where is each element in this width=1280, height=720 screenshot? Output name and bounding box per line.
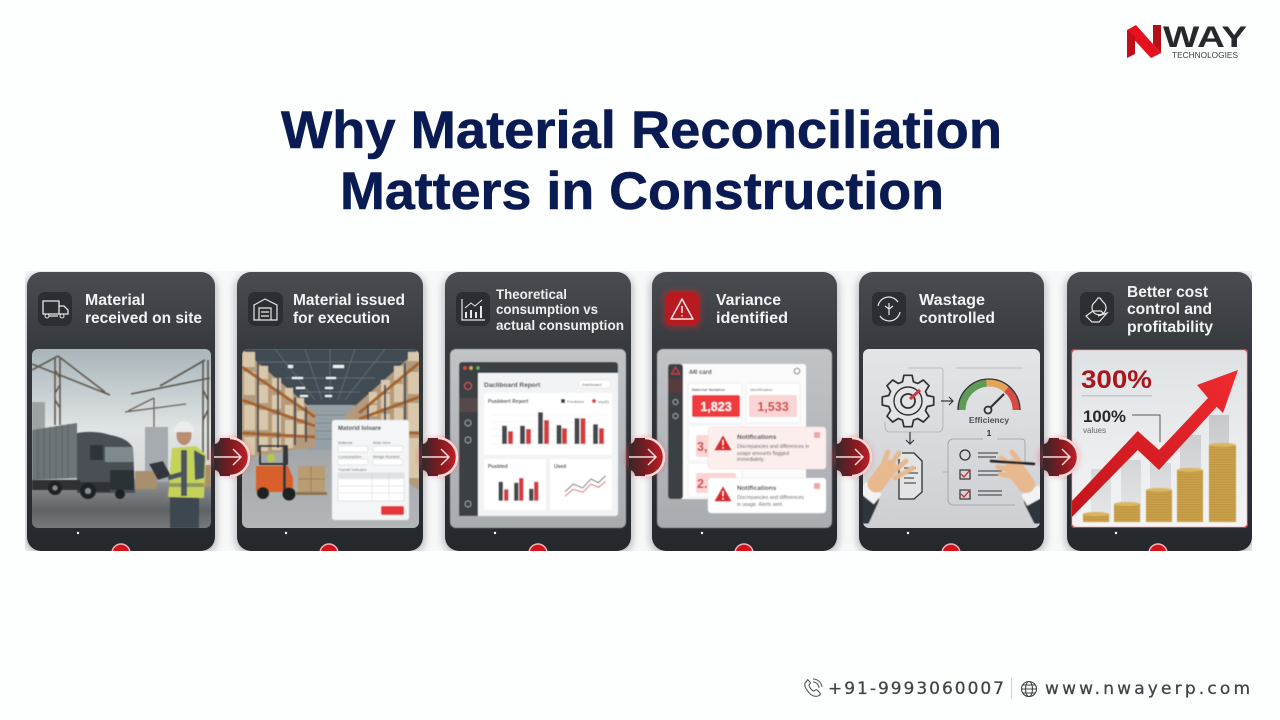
coin stacks [1083, 443, 1236, 522]
checklist [943, 439, 1025, 505]
stat card: 1,823: Material Variation [692, 387, 726, 392]
notification 2 [708, 478, 826, 513]
heading: material received on site: Material [85, 292, 145, 309]
arrow connector 4 [832, 437, 872, 477]
heading: variance identified: identified [716, 310, 788, 327]
bar chart: predicted report [484, 393, 612, 455]
step 1: material received on site [27, 272, 215, 562]
form card: Matorid loloare [338, 426, 382, 432]
form card: Material [338, 440, 352, 445]
gauge: efficiency [958, 379, 1020, 438]
indicator dot [112, 543, 130, 551]
icon: warehouse [248, 292, 283, 326]
step 4: variance identified [652, 272, 837, 562]
indicator dot [942, 543, 960, 551]
stat card: 1,533: Identification [750, 387, 772, 392]
heading: wastage controlled [919, 292, 995, 327]
stat card: 1,823 [688, 383, 742, 423]
stat card: partially hidden: 2.5 [697, 477, 714, 491]
form card: Bridge Number [373, 454, 401, 459]
notification 1: Discrepancies and differences in [737, 444, 809, 450]
icon: gear with target [882, 375, 934, 427]
indicator dot [734, 543, 754, 551]
stat card: 1,533 [746, 383, 800, 423]
step 3: theoretical vs actual consumption [445, 272, 631, 562]
heading: wastage controlled: Wastage [919, 292, 985, 309]
line chart: used: Used [554, 464, 566, 470]
heading: better cost control and profitability: control and [1127, 301, 1212, 318]
arrow connector 3 [625, 437, 665, 477]
notification 1 [708, 427, 826, 469]
bar chart: predicted report: Pusbleert Report [488, 399, 529, 405]
line chart: used [550, 459, 612, 510]
icon: truck [38, 292, 72, 326]
step 5: wastage controlled [858, 272, 1045, 562]
panel: alert dashboard: 44l card [689, 370, 712, 376]
heading: material issued for execution: Material issued [293, 292, 405, 309]
arrow connector 2 [418, 437, 458, 477]
notification 2: Notifications [737, 485, 777, 492]
logo: NWAY Technologies [1127, 21, 1247, 60]
document [899, 453, 922, 499]
indicator dot [320, 543, 338, 551]
heading: theoretical vs actual consumption: Theoretical [496, 287, 567, 302]
heading: better cost control and profitability: profitability [1127, 319, 1213, 336]
heading: wastage controlled: controlled [919, 310, 995, 327]
heading: better cost control and profitability [1127, 284, 1213, 336]
arrow: rising trend [1071, 370, 1238, 517]
stat card: partially hidden [688, 425, 742, 497]
arrow connector 1 [210, 437, 250, 477]
indicator dot [528, 543, 548, 551]
heading: material issued for execution: for execution [293, 310, 390, 327]
form card: Consumption [338, 454, 362, 459]
logo: NWAY Technologies: WAY [1163, 21, 1247, 54]
panel: dashboard report: Dacliboard Report [484, 382, 541, 389]
icon: phone [805, 679, 822, 696]
notification 2: in usage. Alerts sent. [737, 502, 783, 508]
heading: theoretical vs actual consumption: actual consumption [496, 318, 624, 333]
form card: Transit Indicator [338, 467, 367, 472]
icon: red warning triangle [662, 289, 702, 329]
step 6: better cost control and profitability [1067, 272, 1252, 562]
bar chart: predicted [484, 459, 546, 510]
form card [332, 420, 409, 520]
gauge: efficiency: 1 [987, 428, 992, 438]
bar chart: predicted: Pusbted [488, 464, 508, 470]
text: website: www.nwayerp.com [1045, 679, 1250, 699]
heading: material issued for execution [293, 292, 405, 327]
heading: variance identified: Variance [716, 292, 781, 309]
heading: material received on site [85, 292, 202, 327]
notification 2: Discrepancies and differences [737, 495, 804, 501]
stat card: partially hidden: 3, [697, 440, 707, 454]
icon: hand with money bag [1080, 292, 1114, 326]
footer contact [805, 678, 1250, 699]
heading: theoretical vs actual consumption: consumption vs [496, 302, 598, 317]
hands writing [858, 452, 1045, 520]
bar chart: predicted report: Predicted [567, 399, 584, 404]
stat: 100% values [1083, 407, 1160, 442]
illustration: process efficiency diagram [858, 349, 1045, 528]
stat: 100% values: 100% [1083, 407, 1126, 426]
bar chart: predicted report: aspi(t) [598, 399, 610, 404]
heading: material received on site: received on site [85, 310, 202, 327]
panel: dashboard report [450, 349, 626, 528]
step 2: material issued for execution [237, 272, 423, 562]
panel: alert dashboard [657, 349, 832, 528]
notification 1: usage amounts flagged [737, 451, 789, 457]
notification 1: immediately. [737, 457, 765, 463]
gauge: efficiency: Efficiency [969, 415, 1009, 425]
heading: variance identified [716, 292, 788, 327]
heading: better cost control and profitability: Better cost [1127, 284, 1208, 301]
stat: 300%: 300% [1081, 366, 1152, 394]
panel: dashboard report: Dashboard [582, 382, 602, 387]
photo: warehouse with forklift and form [242, 349, 419, 528]
logo: NWAY Technologies: TECHNOLOGIES [1172, 50, 1238, 60]
title: Matters in Construction [340, 162, 944, 221]
process strip background [25, 271, 1254, 554]
chart: rising profit arrow and coins [1071, 349, 1248, 528]
photo: truck and site worker [32, 349, 211, 528]
heading: theoretical vs actual consumption [496, 287, 624, 333]
title [281, 101, 1002, 221]
title: Why Material Reconciliation [281, 101, 1002, 160]
stat: 100% values: values [1083, 426, 1106, 435]
icon: globe [1022, 682, 1036, 696]
icon: line and bar chart [456, 292, 490, 326]
icon: recycle arrows [872, 292, 906, 326]
arrow connector 5 [1039, 437, 1079, 477]
indicator dot [1148, 543, 1168, 551]
stat card: 1,533: 1,533 [757, 400, 789, 414]
text: phone number: +91-9993060007 [828, 679, 1004, 699]
stat card: 1,823: 1,823 [700, 400, 732, 414]
notification 1: Notifications [737, 434, 777, 441]
form card: Main Item [373, 440, 391, 445]
